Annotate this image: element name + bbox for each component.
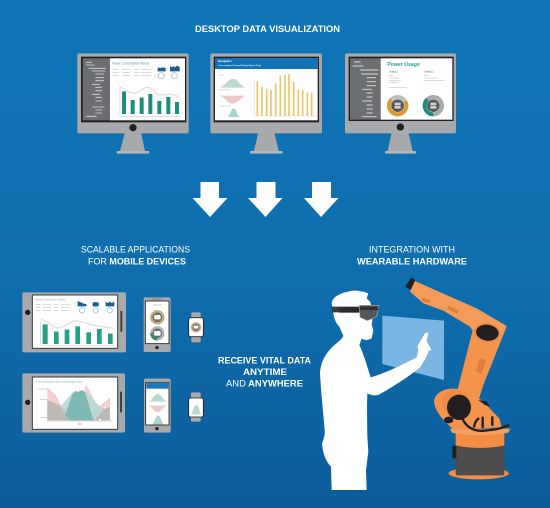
mobile device set (22, 292, 203, 433)
callout: receive vital data: RECEIVE VITAL DATA (218, 356, 311, 366)
monitor: power consumption history: Power Consumption History (112, 61, 149, 65)
smartwatch: gauge (189, 312, 203, 342)
arrows pointing down (192, 182, 338, 217)
monitor: data dashboard: Consumption Demand Rating Report Page (218, 64, 262, 67)
tablet: area chart: Peak Consumption and Cooling Degree Days (36, 379, 83, 383)
arrow: left (192, 182, 228, 217)
tablet: power consumption: Power Consumption History (35, 298, 66, 302)
callout: receive vital data: AND ANYWHERE (226, 378, 301, 388)
heading: mobile devices: SCALABLE APPLICATIONS (81, 244, 190, 254)
monitor: power usage: Setting 1 (389, 71, 399, 74)
monitor: power usage: Power Usage (387, 62, 420, 68)
robot lower arm (457, 325, 507, 401)
monitor: power usage: Setting 2 (424, 71, 434, 74)
robot cables (462, 417, 508, 431)
monitor: data dashboard (210, 53, 322, 154)
phone: donut gauges (144, 297, 171, 352)
wearable hardware scene (320, 277, 510, 490)
robot base (449, 429, 510, 479)
title: DESKTOP DATA VISUALIZATION (195, 24, 340, 34)
monitors: first and second (77, 53, 322, 154)
callout: receive vital data: ANYTIME (243, 367, 287, 377)
robot hip (434, 389, 502, 429)
heading: wearable hardware: INTEGRATION WITH (369, 244, 455, 254)
monitor: power usage (345, 53, 456, 154)
monitor: data dashboard: Navigation (218, 59, 232, 63)
robot forearm (410, 281, 507, 342)
arrow: middle (248, 182, 282, 217)
arrow: right (304, 182, 338, 217)
robot arm (405, 277, 510, 479)
smartwatch: area chart (189, 392, 203, 422)
heading: wearable hardware: WEARABLE HARDWARE (357, 256, 467, 266)
heading: mobile devices: FOR MOBILE DEVICES (88, 256, 186, 266)
tablet: area chart (22, 373, 125, 433)
tablet: power consumption (22, 292, 126, 352)
phone: area charts (144, 379, 171, 433)
person silhouette (320, 291, 432, 490)
headset (332, 305, 379, 321)
monitor: power consumption history (77, 53, 189, 154)
holographic panel (382, 316, 444, 380)
